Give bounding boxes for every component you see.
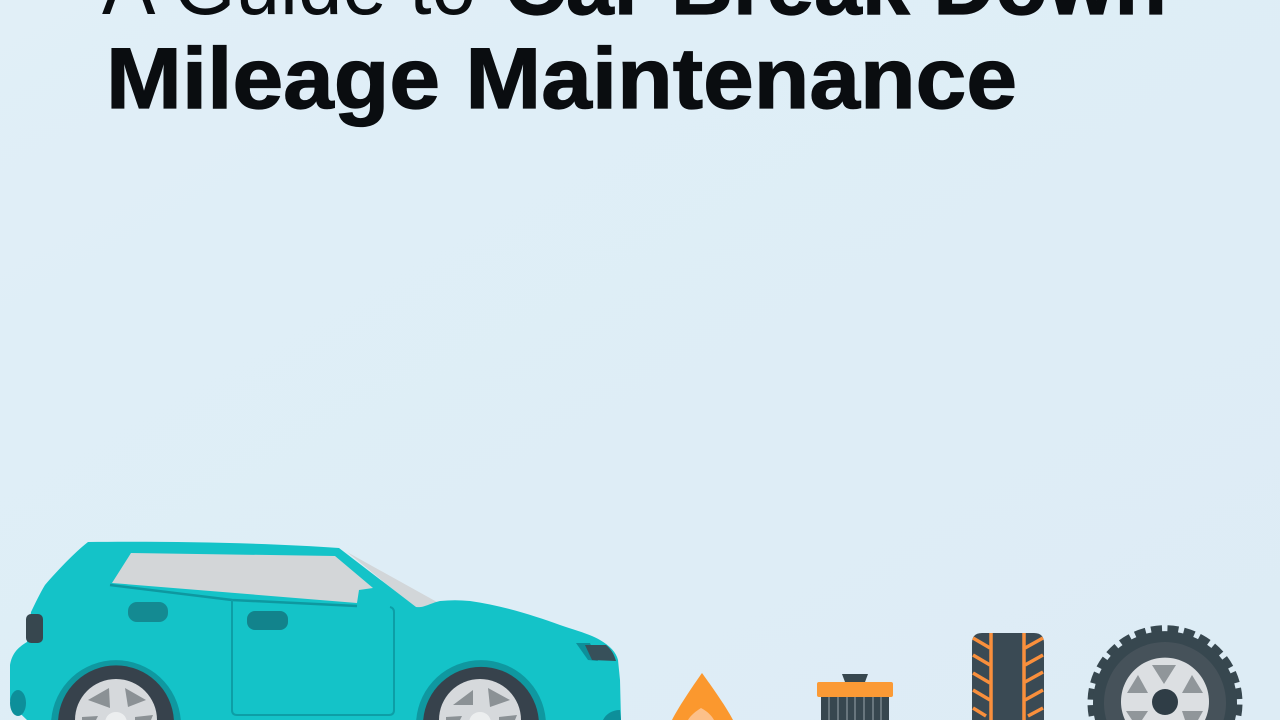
tire inner ring [1104, 642, 1226, 720]
title [102, 0, 1167, 127]
front door handle [247, 611, 288, 630]
car body [10, 542, 621, 720]
rim [1121, 658, 1209, 720]
rim cutouts [1126, 665, 1203, 720]
icon: wheel [1091, 629, 1239, 720]
window sill shadow [110, 585, 357, 606]
front wheel [416, 660, 546, 720]
filter cap [842, 674, 868, 682]
icon: oil filter [817, 674, 893, 720]
filter body [821, 697, 889, 720]
door outline [232, 600, 394, 715]
tread grooves [973, 633, 1043, 720]
headlight [576, 643, 616, 661]
cone inner flame [688, 708, 714, 720]
tire body [1093, 631, 1237, 720]
filter ribs [829, 697, 881, 720]
icon: teal car [10, 542, 621, 720]
rear wheel [51, 660, 181, 720]
rear door handle [128, 602, 168, 622]
icon: warning cone [672, 673, 733, 720]
windshield [347, 552, 437, 608]
front bumper mark [603, 710, 621, 720]
title line 2: Mileage Maintenance [106, 31, 1017, 127]
icon: tire tread [972, 633, 1044, 720]
rear bumper mark [10, 690, 26, 716]
side window [112, 553, 373, 603]
tire knobs [1091, 629, 1239, 716]
hub [1152, 689, 1178, 715]
filter lid [817, 682, 893, 697]
rear light [26, 614, 43, 643]
